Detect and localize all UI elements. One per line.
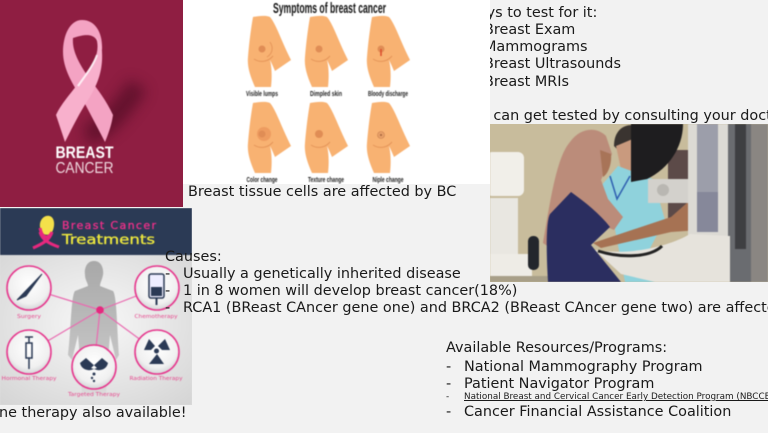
icon: body silhouette	[68, 261, 119, 395]
icon: woman with ribbon	[33, 216, 59, 248]
icon: hormonal therapy	[7, 330, 51, 374]
text: test list: Mammograms	[484, 39, 587, 55]
text: treatment labels: Radiation Therapy	[130, 376, 183, 382]
text: resource four: Cancer Financial Assistance Coalition	[464, 404, 731, 420]
text: treatment labels: Chemotherapy	[134, 314, 178, 320]
text: treatment labels: Surgery	[17, 314, 42, 320]
icon: surgery	[7, 266, 51, 310]
text: breast cancer label: BREAST	[56, 143, 114, 162]
text: causes list	[165, 266, 768, 316]
connector lines	[29, 288, 157, 367]
text: test list: Breast Exam	[484, 22, 575, 38]
text: symptom labels: Bloody discharge	[368, 89, 408, 98]
icon: chemotherapy	[135, 266, 179, 310]
panel: mammogram photo	[490, 124, 768, 282]
icon: visible lumps	[248, 16, 291, 87]
text: symptom labels	[246, 89, 408, 184]
text: symptom labels: Visible lumps	[246, 89, 278, 98]
text: causes list: -	[165, 283, 170, 299]
text: immune therapy: ne therapy also available!	[0, 404, 187, 420]
text: breast cancer label: CANCER	[56, 160, 114, 177]
text: causes list: RCA1 (BReast CAncer gene one) and BRCA2 (BReast CAncer gene two) are affected	[183, 300, 768, 316]
text: resource one: National Mammography Program	[464, 358, 703, 374]
text: resource link: -	[446, 392, 449, 402]
icon: targeted therapy	[72, 345, 116, 389]
text: treatment labels: Hormonal Therapy	[2, 376, 57, 382]
icon: color change	[248, 102, 291, 173]
header band: Treatments	[61, 232, 155, 248]
photo: patient	[543, 130, 700, 282]
icon: pink ribbon	[56, 20, 113, 142]
photo: nurse	[601, 125, 665, 282]
text: tissue cells: Breast tissue cells are affected by BC	[188, 184, 456, 200]
text: treatment labels	[2, 314, 183, 398]
photo: exam chair	[486, 152, 548, 282]
icon: hub	[96, 306, 104, 314]
heading: treatments: Breast Cancer	[62, 219, 156, 232]
icon: nipple change	[367, 102, 410, 173]
heading: symptoms: Symptoms of breast cancer	[273, 0, 386, 17]
text: resource two: Patient Navigator Program	[464, 376, 654, 392]
text: symptom labels: Niple change	[372, 175, 404, 184]
text: breast cancer label	[56, 143, 114, 177]
icon: bloody discharge	[367, 16, 410, 87]
icon: texture change	[305, 102, 348, 173]
panel: breast cancer ribbon	[0, 0, 183, 207]
text: resource two: -	[446, 376, 451, 392]
text: causes list: -	[165, 266, 170, 282]
text: causes heading: Causes:	[165, 248, 222, 264]
text: symptom labels: Color change	[246, 175, 278, 184]
icon: dimpled skin	[305, 16, 348, 87]
text: causes list: Usually a genetically inherited disease	[183, 266, 461, 282]
text: ways to test heading: Ways to test for it:	[464, 4, 597, 20]
photo: background equipment	[668, 150, 690, 220]
text: test list	[484, 22, 621, 90]
text: causes list: 1 in 8 women will develop breast cancer(18%)	[183, 283, 517, 299]
header band	[0, 208, 192, 255]
text: resource one: -	[446, 358, 451, 374]
text: test list: Breast MRIs	[484, 74, 569, 90]
panel: symptoms of breast cancer	[183, 0, 490, 184]
icon: radiation therapy	[135, 330, 179, 374]
text: symptom labels: Dimpled skin	[310, 89, 342, 98]
text: resource four: -	[446, 404, 451, 420]
text: resources heading: Available Resources/Programs:	[446, 340, 667, 356]
text: treatment labels: Targeted Therapy	[67, 392, 121, 398]
text: causes list: -	[165, 300, 170, 316]
text: symptom labels: Texture change	[308, 175, 344, 184]
text: test list: Breast Ultrasounds	[484, 56, 621, 72]
photo: mammography machine	[595, 124, 768, 282]
panel: breast cancer treatments	[0, 208, 192, 405]
icon: ribbon shadow	[86, 85, 138, 135]
